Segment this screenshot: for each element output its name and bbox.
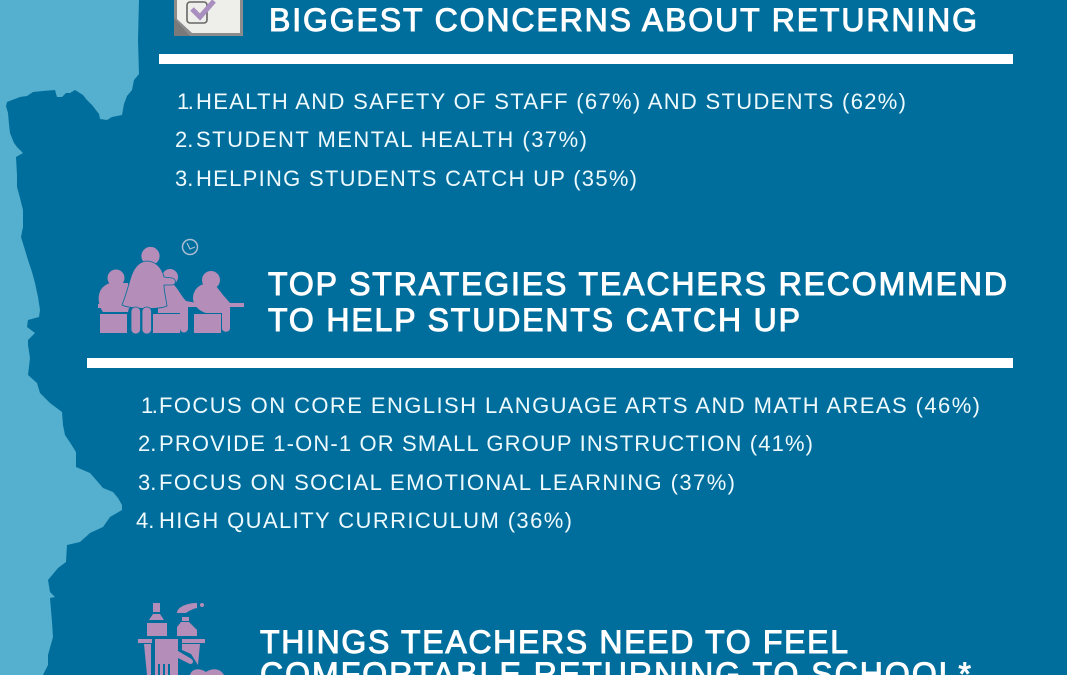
icon: wall clock xyxy=(182,240,198,254)
list: strategies: FOCUS ON SOCIAL EMOTIONAL LEARNING (37%) xyxy=(159,470,735,495)
list: strategies: HIGH QUALITY CURRICULUM (36%) xyxy=(159,508,572,533)
list: strategies: FOCUS ON CORE ENGLISH LANGUAGE ARTS AND MATH AREAS (46%) xyxy=(159,393,980,418)
icon: clipboard checklist xyxy=(174,0,243,36)
icon: teacher and students xyxy=(98,240,244,334)
heading: things teachers need xyxy=(260,624,971,675)
list: concerns: HEALTH AND SAFETY OF STAFF (67%) AND STUDENTS (62%) xyxy=(196,89,906,114)
heading: top strategies xyxy=(268,266,1007,338)
teacher figure xyxy=(122,246,175,334)
heading: things teachers need: THINGS TEACHERS NEED TO FEEL xyxy=(260,624,848,660)
divider bar 1 xyxy=(159,54,1013,64)
heading: top strategies: TO HELP STUDENTS CATCH UP xyxy=(268,302,800,338)
list: strategies: 3. xyxy=(138,470,156,495)
list: strategies: 2. xyxy=(138,431,156,456)
heading: top strategies: TOP STRATEGIES TEACHERS RECOMMEND xyxy=(268,266,1007,302)
list: concerns: 2. xyxy=(175,127,193,152)
list: strategies: PROVIDE 1-ON-1 OR SMALL GROUP INSTRUCTION (41%) xyxy=(159,431,813,456)
heading: biggest concerns: BIGGEST CONCERNS ABOUT RETURNING xyxy=(269,2,977,38)
list: concerns: HELPING STUDENTS CATCH UP (35%) xyxy=(196,166,637,191)
list: concerns: STUDENT MENTAL HEALTH (37%) xyxy=(196,127,587,152)
list: concerns: 3. xyxy=(175,166,193,191)
list: strategies xyxy=(136,393,980,533)
light blue coastline shape xyxy=(0,0,139,675)
list: strategies: 4. xyxy=(136,508,154,533)
divider bar 2 xyxy=(87,358,1013,368)
icon: cleaning supplies xyxy=(138,603,224,675)
list: concerns xyxy=(175,89,906,191)
list: concerns: 1. xyxy=(177,89,193,114)
list: strategies: 1. xyxy=(141,393,157,418)
